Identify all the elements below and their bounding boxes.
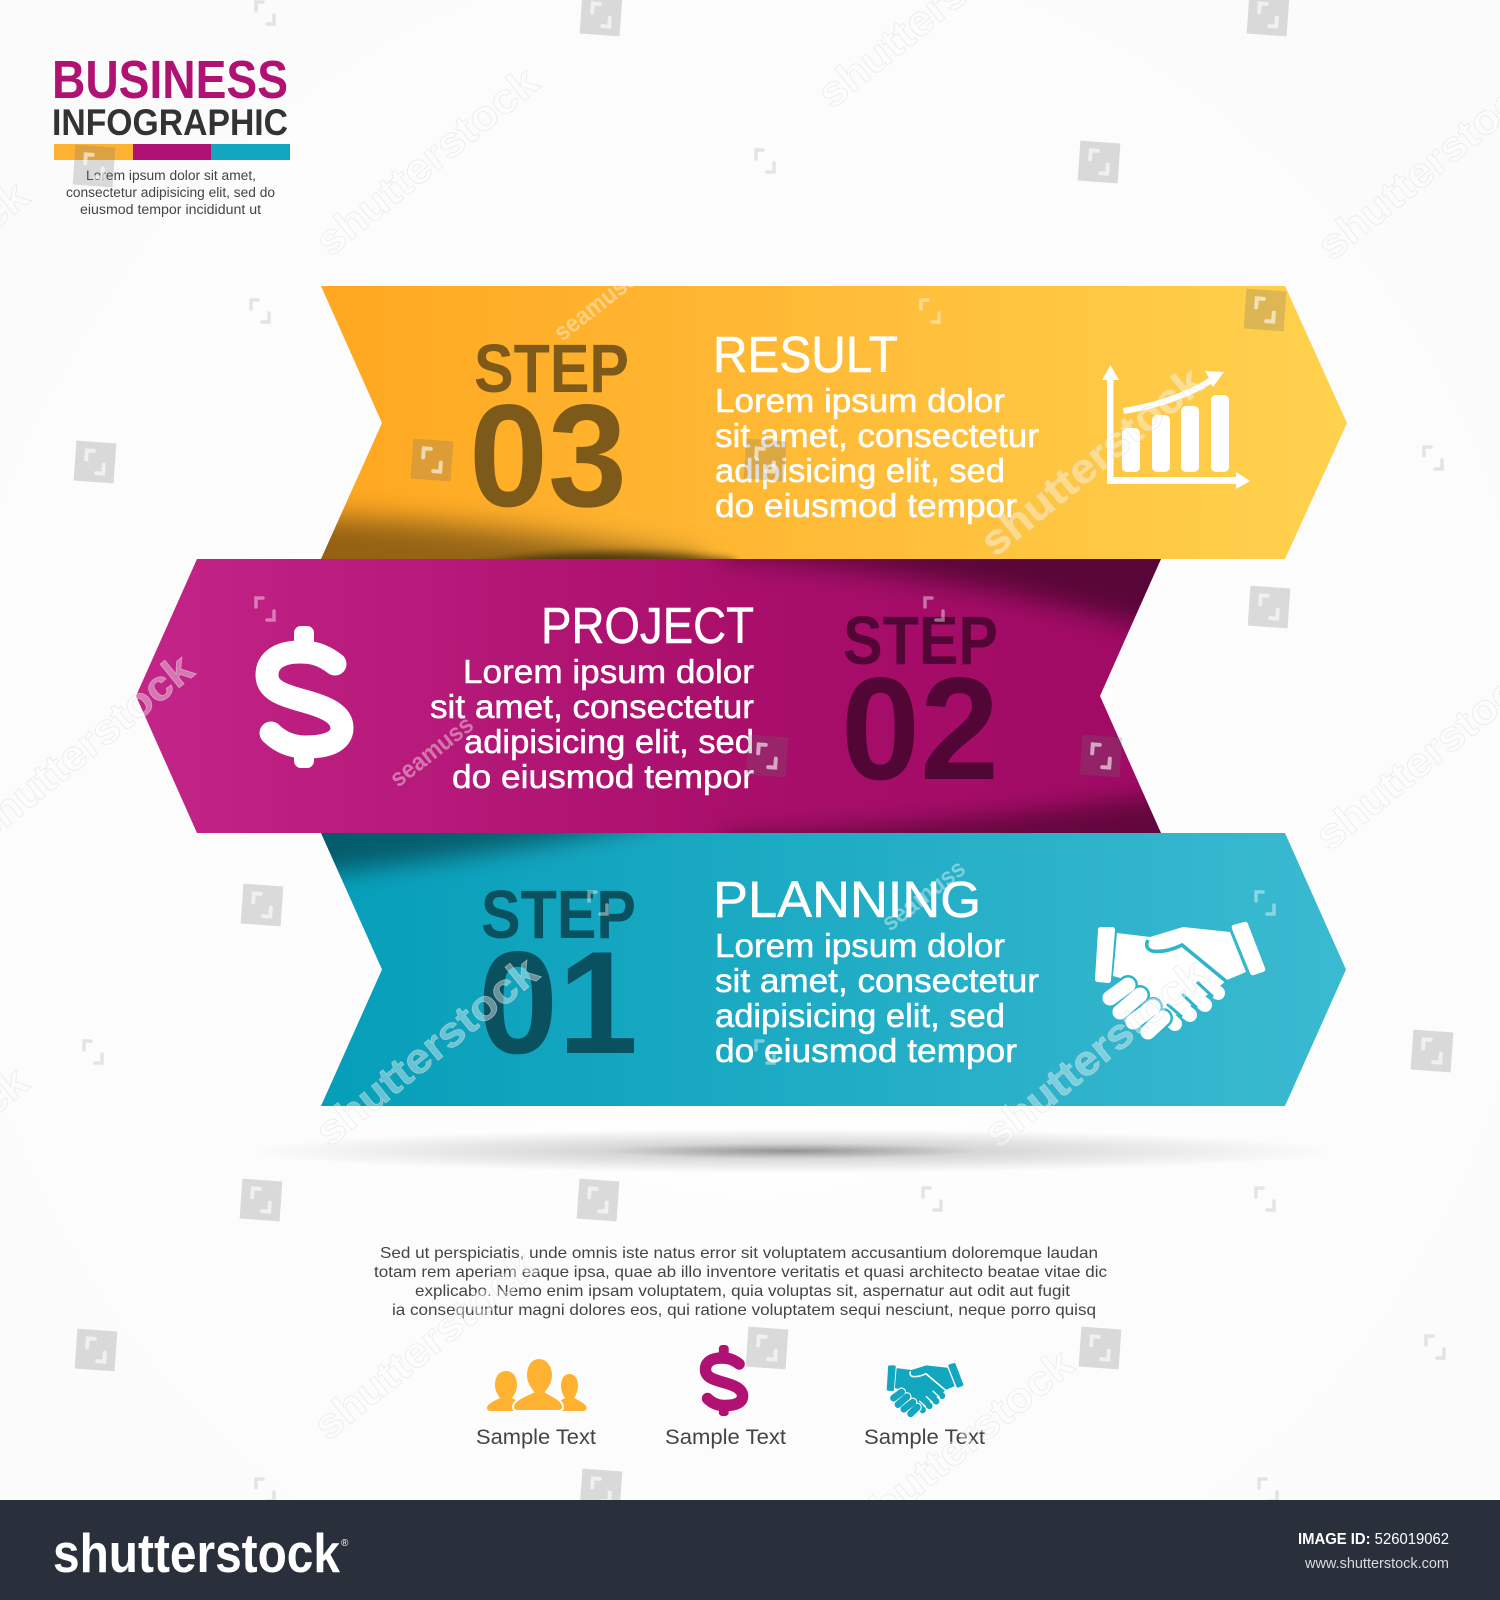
body text: do eiusmod tempor xyxy=(452,758,754,795)
yellow arrow ribbon xyxy=(321,286,1347,559)
body text: Lorem ipsum dolor xyxy=(463,653,754,690)
heading: PLANNING xyxy=(713,871,981,928)
body text: do eiusmod tempor xyxy=(715,487,1017,524)
body text: Lorem ipsum dolor xyxy=(715,927,1005,964)
watermark overlay: shutterstock xyxy=(306,57,548,265)
footer bar xyxy=(0,1500,1500,1600)
image id: IMAGE ID: 526019062 xyxy=(1298,1531,1449,1548)
title description: consectetur adipisicing elit, sed do xyxy=(66,185,275,200)
icon: growth chart xyxy=(1102,365,1250,489)
registered mark: ® xyxy=(341,1538,349,1549)
teal arrow ribbon xyxy=(321,833,1346,1106)
icon: dollar xyxy=(267,626,342,768)
heading: infographic: INFOGRAPHIC xyxy=(52,102,288,143)
watermark overlay: shutterstock xyxy=(971,357,1213,565)
footer paragraph: explicabo. Nemo enim ipsam voluptatem, quia voluptas sit, aspernatur aut odit aut fugit xyxy=(415,1283,1071,1300)
step number: 02 xyxy=(841,647,999,810)
watermark overlay: seamuss xyxy=(384,710,479,793)
footer logo: shutterstock xyxy=(53,1522,340,1584)
footer paragraph: totam rem aperiam eaque ipsa, quae ab illo inventore veritatis et quasi architecto beatae vitae dic xyxy=(374,1264,1107,1281)
colour bar xyxy=(54,144,290,160)
label: Sample Text xyxy=(665,1426,786,1449)
panel: step 02 project xyxy=(136,559,1161,833)
body text xyxy=(715,382,1039,524)
heading: PROJECT xyxy=(541,597,754,654)
title block xyxy=(52,50,290,217)
magenta arrow ribbon xyxy=(136,559,1161,833)
body text: do eiusmod tempor xyxy=(715,1032,1017,1069)
watermark overlay: seamuss xyxy=(548,264,643,347)
footer paragraph: Sed ut perspiciatis, unde omnis iste natus error sit voluptatem accusantium doloremque laudan xyxy=(380,1245,1098,1262)
watermark overlay: shutterstock xyxy=(306,947,548,1155)
footer paragraph xyxy=(374,1245,1107,1319)
watermark overlay: seamuss xyxy=(876,854,971,937)
heading: business: BUSINESS xyxy=(52,50,288,110)
step label: STEP xyxy=(481,876,636,953)
body text: adipisicing elit, sed xyxy=(464,723,754,760)
body text: sit amet, consectetur xyxy=(715,417,1039,454)
step number: 03 xyxy=(469,374,627,537)
watermark overlay: shutterstock xyxy=(304,1241,546,1449)
icon: handshake xyxy=(1095,922,1265,1032)
watermark overlay: shutterstock xyxy=(974,949,1216,1157)
panel: step 01 planning xyxy=(321,833,1346,1106)
label: Sample Text xyxy=(864,1426,985,1449)
body text: adipisicing elit, sed xyxy=(715,452,1005,489)
ground shadow xyxy=(245,1129,1335,1173)
body text: Lorem ipsum dolor xyxy=(715,382,1005,419)
footer paragraph: ia consequuntur magni dolores eos, qui ratione voluptatem sequi nesciunt, neque porro quisq xyxy=(392,1302,1096,1319)
panel: step 03 result xyxy=(321,286,1347,559)
legend: people xyxy=(476,1358,596,1449)
title description xyxy=(66,168,275,217)
heading: RESULT xyxy=(713,326,898,383)
icon: dollar small xyxy=(705,1345,743,1416)
body text: adipisicing elit, sed xyxy=(715,997,1005,1034)
body text xyxy=(430,653,754,795)
label: Sample Text xyxy=(476,1426,596,1449)
title description: Lorem ipsum dolor sit amet, xyxy=(86,168,256,183)
legend: dollar xyxy=(665,1345,786,1449)
body text: sit amet, consectetur xyxy=(715,962,1039,999)
title description: eiusmod tempor incididunt ut xyxy=(80,202,261,217)
site url: www.shutterstock.com xyxy=(1304,1555,1449,1572)
step number: 01 xyxy=(478,921,638,1084)
body text: sit amet, consectetur xyxy=(430,688,754,725)
body text xyxy=(715,927,1039,1069)
legend: handshake xyxy=(864,1363,985,1449)
icon: handshake small xyxy=(887,1363,963,1414)
icon: people xyxy=(487,1358,587,1411)
step label: STEP xyxy=(843,602,998,679)
step label: STEP xyxy=(474,330,629,407)
watermark overlay: shutterstock xyxy=(841,1339,1083,1547)
